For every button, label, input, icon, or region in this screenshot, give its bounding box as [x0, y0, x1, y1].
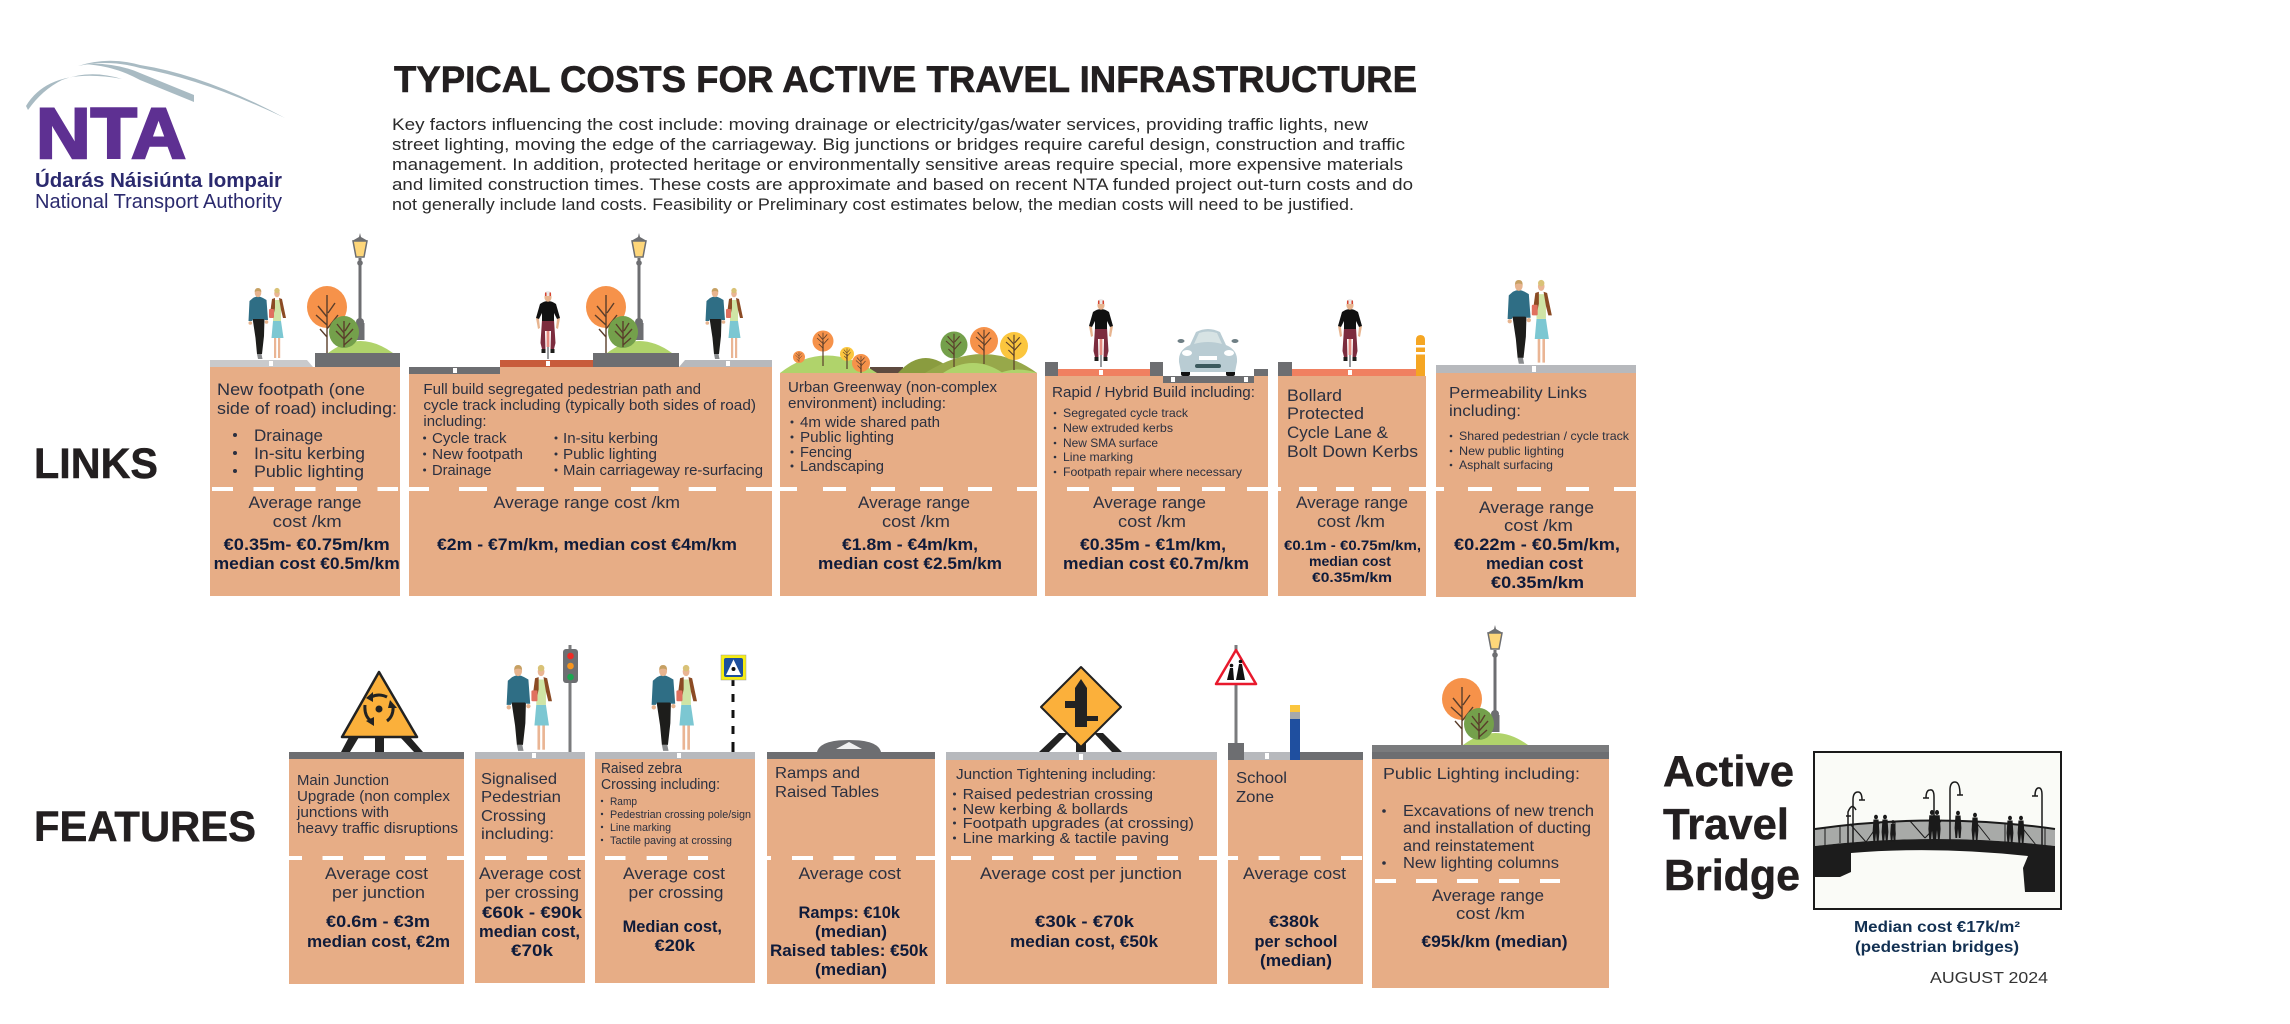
- cost: median cost, €50k: [1010, 933, 1159, 951]
- cost: Average range: [1479, 499, 1594, 517]
- cost: median cost, €2m: [307, 933, 450, 951]
- illustration: school sign, footpath and post: [1216, 645, 1363, 760]
- logo: NTA: [26, 61, 285, 213]
- illustration: road, cycle track, tree, lamp and pedestrians: [409, 233, 772, 374]
- cost: [1284, 494, 1421, 585]
- cost: €70k: [511, 942, 554, 960]
- panel: raised zebra crossing: [595, 655, 755, 983]
- description: Line marking & tactile paving: [963, 831, 1169, 847]
- panel: new footpath: [210, 233, 400, 596]
- cost: €30k - €70k: [1035, 913, 1135, 931]
- description: Rapid / Hybrid Build including:: [1052, 385, 1255, 401]
- illustration: road, tree and lamp: [1372, 625, 1609, 759]
- bridge pedestrians: [1873, 810, 2024, 843]
- panel: school zone: [1216, 645, 1363, 984]
- cost: [1454, 499, 1620, 592]
- cost: €2m - €7m/km, median cost €4m/km: [437, 536, 737, 554]
- intro text: not generally include land costs. Feasibility or Preliminary cost estimates below, the median costs will need to be justified.: [392, 196, 1354, 214]
- description: New kerbing & bollards: [963, 802, 1128, 818]
- icon: post: [1290, 705, 1300, 760]
- description: Cycle Lane &: [1287, 424, 1388, 442]
- cost: Raised tables: €50k: [770, 942, 929, 960]
- cost: cost /km: [273, 513, 342, 531]
- description: New public lighting: [1459, 444, 1564, 458]
- cost: Average range: [1296, 494, 1408, 512]
- cost: median cost,: [479, 923, 580, 941]
- logo English name: National Transport Authority: [35, 191, 282, 213]
- description: Drainage: [432, 463, 492, 479]
- cost: €1.8m - €4m/km,: [842, 536, 978, 554]
- panel: full build segregated path: [409, 233, 772, 596]
- cost: [980, 865, 1182, 951]
- cost: €0.35m/km: [1312, 570, 1392, 585]
- description: Footpath upgrades (at crossing): [963, 816, 1194, 832]
- cost: [770, 865, 929, 979]
- bridge cost: (pedestrian bridges): [1855, 939, 2019, 956]
- description: [1052, 385, 1255, 479]
- description: side of road) including:: [217, 400, 397, 418]
- description: Upgrade (non complex: [297, 789, 451, 805]
- description: Footpath repair where necessary: [1063, 465, 1242, 479]
- cost: €0.1m - €0.75m/km,: [1284, 538, 1421, 553]
- illustration: pedestrians and crossing sign: [595, 655, 755, 759]
- cost: Median cost,: [623, 918, 722, 936]
- cost: [623, 865, 725, 955]
- cost: median cost €2.5m/km: [818, 555, 1002, 573]
- illustration: raised table: [767, 740, 935, 759]
- description: [1382, 766, 1594, 872]
- description: Shared pedestrian / cycle track: [1459, 429, 1630, 443]
- panel: permeability links: [1436, 280, 1636, 597]
- cost: median cost €0.5m/km: [214, 555, 400, 573]
- cost: per crossing: [628, 884, 724, 902]
- cost: €0.22m - €0.5m/km,: [1454, 536, 1620, 554]
- description: New footpath (one: [217, 381, 365, 399]
- bridge lamps: [1846, 782, 2042, 845]
- description: Urban Greenway (non-complex: [788, 380, 998, 396]
- cost: cost /km: [1317, 513, 1385, 531]
- cost: €0.35m - €1m/km,: [1080, 536, 1226, 554]
- panel: rapid hybrid build: [1045, 299, 1268, 596]
- description: Ramp: [610, 796, 637, 808]
- cost: €60k - €90k: [482, 904, 583, 922]
- cost: €0.6m - €3m: [326, 913, 430, 931]
- intro text: street lighting, moving the edge of the carriageway. Big junctions or bridges require careful design, construction and traffic: [392, 136, 1405, 154]
- description: Excavations of new trench: [1403, 803, 1594, 820]
- icon: school warning sign: [1216, 650, 1256, 684]
- cost: cost /km: [882, 513, 950, 531]
- cost: Average range cost /km: [494, 494, 680, 512]
- description: environment) including:: [788, 396, 946, 412]
- description: In-situ kerbing: [254, 445, 365, 463]
- illustration: footpath, pedestrians, tree and lamp: [210, 233, 400, 367]
- cost: Average range: [858, 494, 970, 512]
- cost: Average range: [248, 494, 362, 512]
- cost: [214, 494, 400, 573]
- heading: active travel bridge: Active: [1663, 747, 1794, 796]
- description: Zone: [1236, 789, 1274, 806]
- cost: median cost: [1486, 555, 1584, 573]
- cost: (median): [815, 961, 887, 979]
- illustration: shared path and pedestrians: [1436, 280, 1636, 373]
- description: Protected: [1287, 405, 1364, 423]
- illustration: junction warning sign: [946, 667, 1217, 760]
- heading: active travel bridge: Bridge: [1664, 851, 1800, 900]
- description: Junction Tightening including:: [956, 767, 1156, 783]
- icon: bollard: [1416, 335, 1425, 376]
- bridge railing: [1815, 820, 2055, 846]
- description: and reinstatement: [1403, 838, 1535, 855]
- logo letters: NTA: [36, 95, 186, 174]
- icon: car: [1178, 329, 1238, 376]
- intro text: management. In addition, protected heritage or environmentally sensitive areas require special, more expensive materials: [392, 156, 1403, 174]
- description: including:: [1449, 403, 1521, 420]
- description: Bolt Down Kerbs: [1287, 443, 1418, 461]
- cost: €0.35m/km: [1491, 574, 1584, 592]
- description: New SMA surface: [1063, 436, 1158, 450]
- panel: signalised pedestrian crossing: [475, 645, 585, 983]
- illustration: cycle track, kerbs and car: [1045, 299, 1268, 383]
- description: [775, 765, 879, 801]
- cost: [479, 865, 583, 960]
- panel: public lighting: [1372, 625, 1609, 988]
- description: [601, 761, 751, 847]
- description: Tactile paving at crossing: [610, 835, 732, 847]
- cost: Average range: [1432, 887, 1544, 905]
- description: Public lighting: [254, 463, 364, 481]
- description: [788, 380, 998, 475]
- description: Ramps and: [775, 765, 860, 782]
- panel: urban greenway: [780, 327, 1037, 596]
- section heading: links: LINKS: [34, 440, 158, 488]
- description: junctions with: [296, 805, 389, 821]
- description: New extruded kerbs: [1063, 421, 1173, 435]
- description: Pedestrian crossing pole/sign: [610, 809, 751, 821]
- cost: Average range: [1093, 494, 1206, 512]
- section heading: features: FEATURES: [34, 803, 256, 851]
- cost: per junction: [332, 884, 425, 902]
- cost: median cost €0.7m/km: [1063, 555, 1249, 573]
- description: [423, 382, 763, 479]
- cost: Average cost: [1243, 865, 1346, 883]
- description: Bollard: [1287, 387, 1342, 405]
- cost: [818, 494, 1002, 573]
- logo swoosh: [26, 61, 285, 118]
- bridge cost: [1854, 919, 2020, 956]
- cost: [1063, 494, 1249, 573]
- intro text: and limited construction times. These costs are approximate and based on recent NTA funded project out-turn costs and do: [392, 176, 1413, 194]
- cost: per crossing: [485, 884, 579, 902]
- description: Crossing including:: [601, 777, 720, 793]
- cost: €0.35m- €0.75m/km: [224, 536, 390, 554]
- description: cycle track including (typically both sides of road): [423, 398, 756, 414]
- description: Raised Tables: [775, 784, 879, 801]
- illustration: roundabout warning sign: [289, 672, 464, 759]
- cost: per school: [1254, 933, 1338, 951]
- description: Main Junction: [297, 773, 389, 789]
- description: Public lighting: [563, 447, 657, 463]
- logo Irish name: Údarás Náisiúnta Iompair: [35, 168, 282, 192]
- illustration: pedestrians and traffic light: [475, 645, 585, 759]
- cost: [437, 494, 737, 554]
- description: Line marking: [1063, 450, 1133, 464]
- description: Public Lighting including:: [1383, 766, 1580, 783]
- description: School: [1236, 770, 1287, 787]
- description: Full build segregated pedestrian path and: [423, 382, 701, 398]
- bridge cost: Median cost €17k/m²: [1854, 919, 2020, 936]
- description: [1236, 770, 1287, 806]
- cost: Ramps: €10k: [798, 904, 901, 922]
- cost: Average cost: [798, 865, 901, 883]
- cost: Average cost: [325, 865, 428, 883]
- illustration: greenway hills and trees: [780, 327, 1037, 373]
- cost: [307, 865, 450, 951]
- description: Pedestrian: [481, 789, 561, 806]
- cost: Average cost per junction: [980, 865, 1182, 883]
- description: New footpath: [432, 447, 523, 463]
- panel: bollard protected cycle lane: [1278, 299, 1426, 596]
- panel: junction tightening: [946, 667, 1217, 984]
- cost: [1243, 865, 1346, 970]
- cost: cost /km: [1504, 517, 1573, 535]
- cost: Average cost: [479, 865, 581, 883]
- cost: median cost: [1309, 554, 1392, 569]
- cost: €380k: [1269, 913, 1320, 931]
- cost: €95k/km (median): [1422, 933, 1568, 951]
- description: Permeability Links: [1449, 385, 1587, 402]
- description: [1449, 385, 1630, 472]
- description: Signalised: [481, 771, 557, 788]
- cost: Average cost: [623, 865, 725, 883]
- description: Line marking: [610, 822, 671, 834]
- cost: [1422, 887, 1568, 951]
- description: [217, 381, 397, 481]
- description: Drainage: [254, 427, 323, 445]
- heading: active travel bridge: Travel: [1663, 800, 1789, 849]
- description: [1287, 387, 1418, 461]
- icon: zebra crossing sign: [721, 655, 746, 680]
- description: heavy traffic disruptions: [297, 821, 458, 837]
- description: In-situ kerbing: [563, 431, 658, 447]
- description: Public lighting: [800, 430, 894, 446]
- bridge deck and piers: [1815, 839, 2055, 892]
- image: pedestrian bridge silhouette: [1814, 752, 2061, 909]
- intro text: [392, 116, 1413, 214]
- description: Main carriageway re-surfacing: [563, 463, 763, 479]
- description: [953, 767, 1194, 847]
- description: including:: [423, 414, 487, 430]
- description: Crossing: [481, 808, 546, 825]
- intro text: Key factors influencing the cost include: moving drainage or electricity/gas/water services, providing traffic lights, new: [392, 116, 1368, 134]
- description: New lighting columns: [1403, 855, 1559, 872]
- description: [481, 771, 561, 843]
- panel: ramps and raised tables: [767, 740, 935, 984]
- description: 4m wide shared path: [800, 415, 940, 431]
- panel: main junction upgrade: [289, 672, 464, 984]
- description: Segregated cycle track: [1063, 406, 1189, 420]
- description: [296, 773, 458, 837]
- cost: €20k: [655, 937, 696, 955]
- cost: cost /km: [1118, 513, 1186, 531]
- icon: traffic light: [563, 649, 578, 683]
- description: Raised pedestrian crossing: [963, 787, 1153, 803]
- description: Fencing: [800, 445, 852, 461]
- description: including:: [481, 826, 554, 843]
- cost: cost /km: [1456, 905, 1525, 923]
- description: Raised zebra: [601, 761, 683, 777]
- heading: active travel bridge: [1663, 747, 1800, 900]
- cost: (median): [815, 923, 887, 941]
- cost: (median): [1260, 952, 1332, 970]
- description: Cycle track: [432, 431, 507, 447]
- description: and installation of ducting: [1403, 820, 1591, 837]
- date: AUGUST 2024: [1930, 970, 2048, 987]
- illustration: kerb, cycle lane, cyclist and bollard: [1278, 299, 1425, 376]
- description: Landscaping: [800, 459, 884, 475]
- description: Asphalt surfacing: [1459, 458, 1553, 472]
- title: TYPICAL COSTS FOR ACTIVE TRAVEL INFRASTRUCTURE: [394, 59, 1417, 100]
